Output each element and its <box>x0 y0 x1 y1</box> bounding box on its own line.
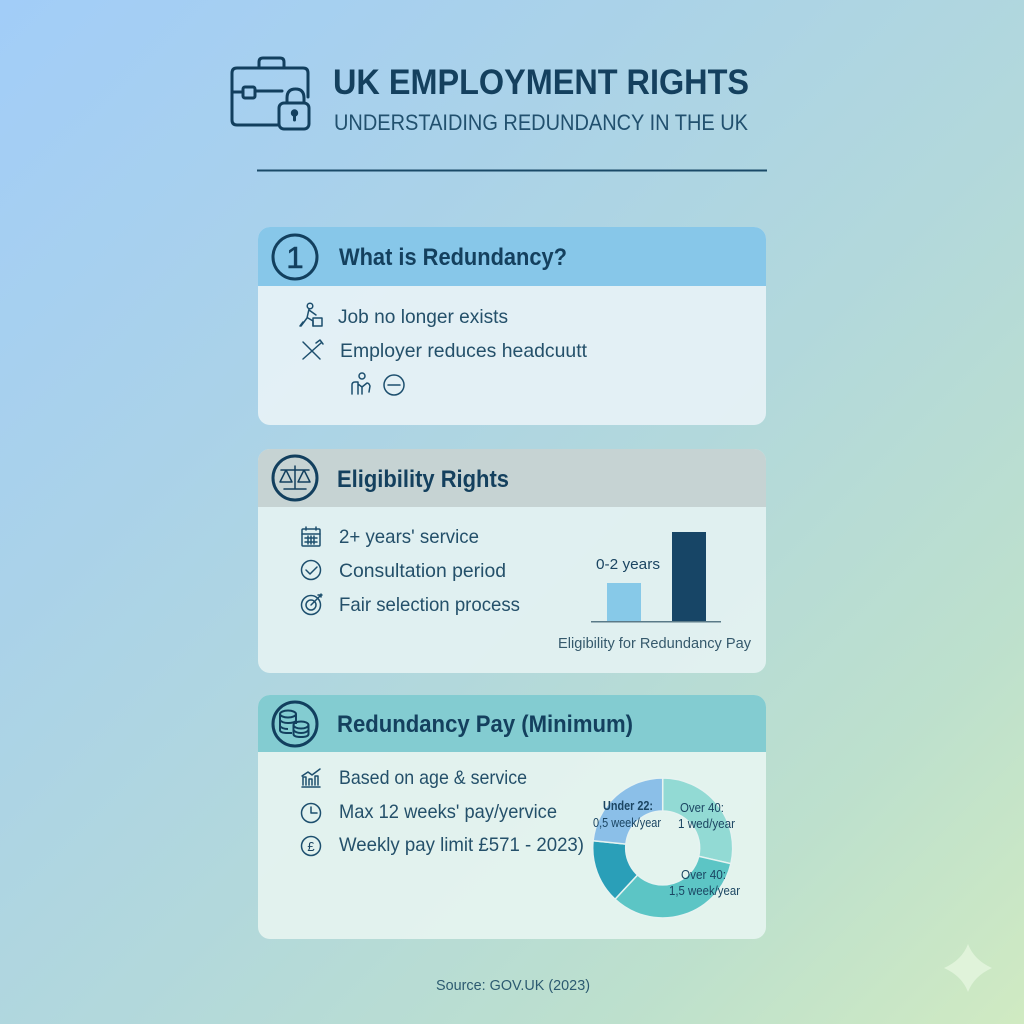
icon: scales of justice <box>273 456 317 500</box>
donut label: over 40: Over 40: <box>680 801 724 815</box>
panel: redundancy pay <box>258 695 766 939</box>
donut label: under 22: Under 22: <box>603 799 653 813</box>
chart caption: Eligibility for Redundancy Pay <box>558 635 751 652</box>
source note: Source: GOV.UK (2023) <box>436 977 590 994</box>
text: fair selection: Fair selection process <box>339 594 520 616</box>
icon: coin stacks <box>273 702 317 746</box>
title: UK EMPLOYMENT RIGHTS <box>333 63 749 102</box>
icon: calendar <box>302 527 320 546</box>
donut label: second over 40: Over 40: <box>681 868 726 882</box>
icon: number one in circle <box>273 235 317 279</box>
heading: Redundancy Pay (Minimum) <box>337 711 633 738</box>
donut label: under 22 rate: 0,5 week/year <box>593 816 661 830</box>
icon: minus circle <box>384 375 404 395</box>
icon: worker with box <box>300 303 322 326</box>
icon: growth chart <box>302 769 320 787</box>
panel header band <box>258 449 766 507</box>
donut label: over 40 rate: 1 wed/year <box>678 817 735 831</box>
text: consultation: Consultation period <box>339 560 506 582</box>
bar label: 0-2 years <box>596 556 660 573</box>
text: based on age: Based on age & service <box>339 767 527 789</box>
icon: clock <box>302 804 320 822</box>
icon: pound coin <box>302 836 320 856</box>
text: job no longer exists: Job no longer exists <box>338 306 508 328</box>
panel header band <box>258 695 766 752</box>
heading: What is Redundancy? <box>339 244 567 271</box>
icon: briefcase with padlock <box>232 58 309 129</box>
donut chart <box>593 778 740 918</box>
text: service: 2+ years' service <box>339 526 479 548</box>
icon: check circle <box>302 560 320 580</box>
text: employer reduces headcount: Employer reduces headcuutt <box>340 340 588 362</box>
header divider <box>257 170 767 172</box>
subtitle: UNDERSTAIDING REDUNDANCY IN THE UK <box>334 110 748 135</box>
icon: number one in circle: 1 <box>286 240 304 275</box>
panel: eligibility rights <box>258 449 766 673</box>
text: max weeks: Max 12 weeks' pay/yervice <box>339 801 557 823</box>
icon: pound coin: £ <box>307 839 315 854</box>
bar chart <box>558 532 751 652</box>
panel header band <box>258 227 766 286</box>
text: weekly limit: Weekly pay limit £571 - 2023) <box>339 834 584 856</box>
decorative sparkle <box>944 944 992 992</box>
heading: Eligibility Rights <box>337 466 509 493</box>
icon: person group <box>352 373 370 394</box>
icon: target <box>302 594 322 614</box>
panel: what is redundancy <box>258 227 766 425</box>
icon: crossed tools <box>303 340 323 359</box>
donut label: second over 40 rate: 1,5 week/year <box>669 884 740 898</box>
